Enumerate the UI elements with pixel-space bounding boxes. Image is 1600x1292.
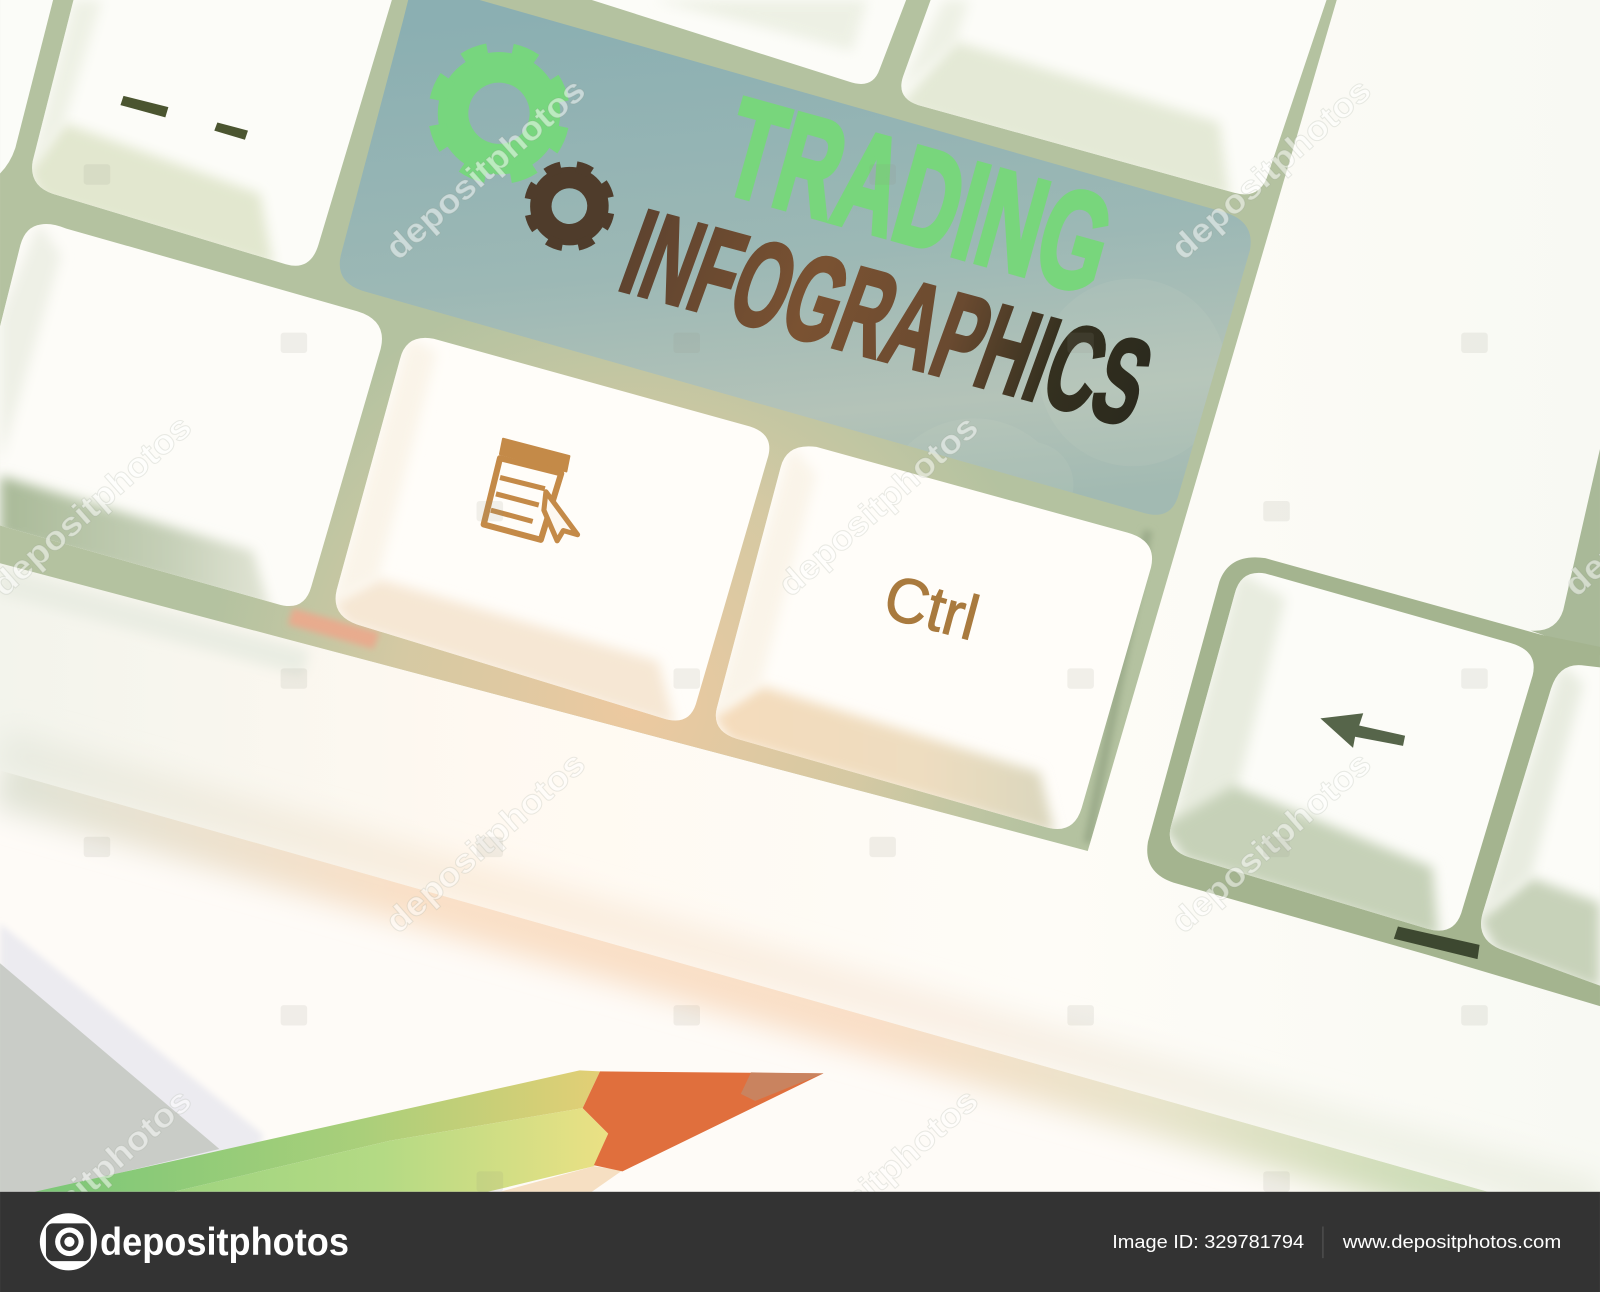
key: blue trading infographics bbox=[340, 0, 1251, 515]
paper stack bbox=[0, 923, 263, 1192]
key gap marker bbox=[1394, 927, 1480, 959]
arrow key well bbox=[1147, 557, 1600, 1006]
key well bbox=[0, 0, 1337, 851]
icon: menu document with cursor bbox=[484, 439, 578, 541]
pencil lead bbox=[583, 1071, 823, 1171]
key: large left bbox=[0, 222, 382, 612]
image id: Image ID: 329781794 bbox=[1112, 1231, 1304, 1252]
pencil bbox=[35, 1070, 823, 1192]
icon: brown gear bbox=[523, 160, 615, 252]
watermarks: depositphotos bbox=[379, 72, 593, 267]
right edge gap bbox=[1531, 449, 1600, 655]
title: infographics: INFOGRAPHICS bbox=[606, 184, 1168, 451]
icon: arrow bbox=[1320, 713, 1405, 748]
watermark camera marks bbox=[84, 164, 1488, 1192]
ctrl label: Ctrl bbox=[877, 562, 986, 654]
key: top centre bbox=[592, 0, 906, 84]
icon: green gear bbox=[425, 39, 573, 187]
pencil wood bbox=[500, 1166, 622, 1192]
pencil upper facet bbox=[35, 1070, 600, 1192]
watermarks: depositphotos bbox=[379, 745, 593, 941]
keyboard casing bbox=[0, 564, 1598, 1192]
icon: dash bbox=[120, 96, 168, 117]
lens flare bbox=[878, 279, 1227, 612]
footer divider bbox=[1322, 1226, 1323, 1258]
logo: wordmark: depositphotos bbox=[100, 1221, 349, 1264]
website: www.depositphotos.com bbox=[1342, 1231, 1561, 1252]
casing shadow on desk bbox=[0, 770, 1488, 1192]
pencil lower facet bbox=[173, 1108, 608, 1192]
key: right neighbour bbox=[1480, 663, 1600, 990]
key: far left top bbox=[0, 0, 53, 173]
key: ctrl bbox=[712, 445, 1152, 835]
watermarks: depositphotos bbox=[1164, 72, 1378, 267]
logo: camera icon bbox=[40, 1213, 97, 1270]
key: menu bbox=[333, 337, 769, 727]
watermarks: depositphotos bbox=[772, 409, 986, 604]
icon: underscore bbox=[214, 122, 248, 140]
title: trading: TRADING bbox=[709, 69, 1127, 324]
key: top right bbox=[898, 0, 1327, 199]
footer bar bbox=[0, 1192, 1600, 1292]
key: dash and underscore bbox=[29, 0, 392, 267]
watermarks: depositphotos bbox=[772, 1082, 986, 1277]
pencil tip bbox=[741, 1072, 823, 1101]
key: left arrow bbox=[1163, 571, 1534, 939]
watermarks: depositphotos bbox=[1164, 745, 1378, 941]
